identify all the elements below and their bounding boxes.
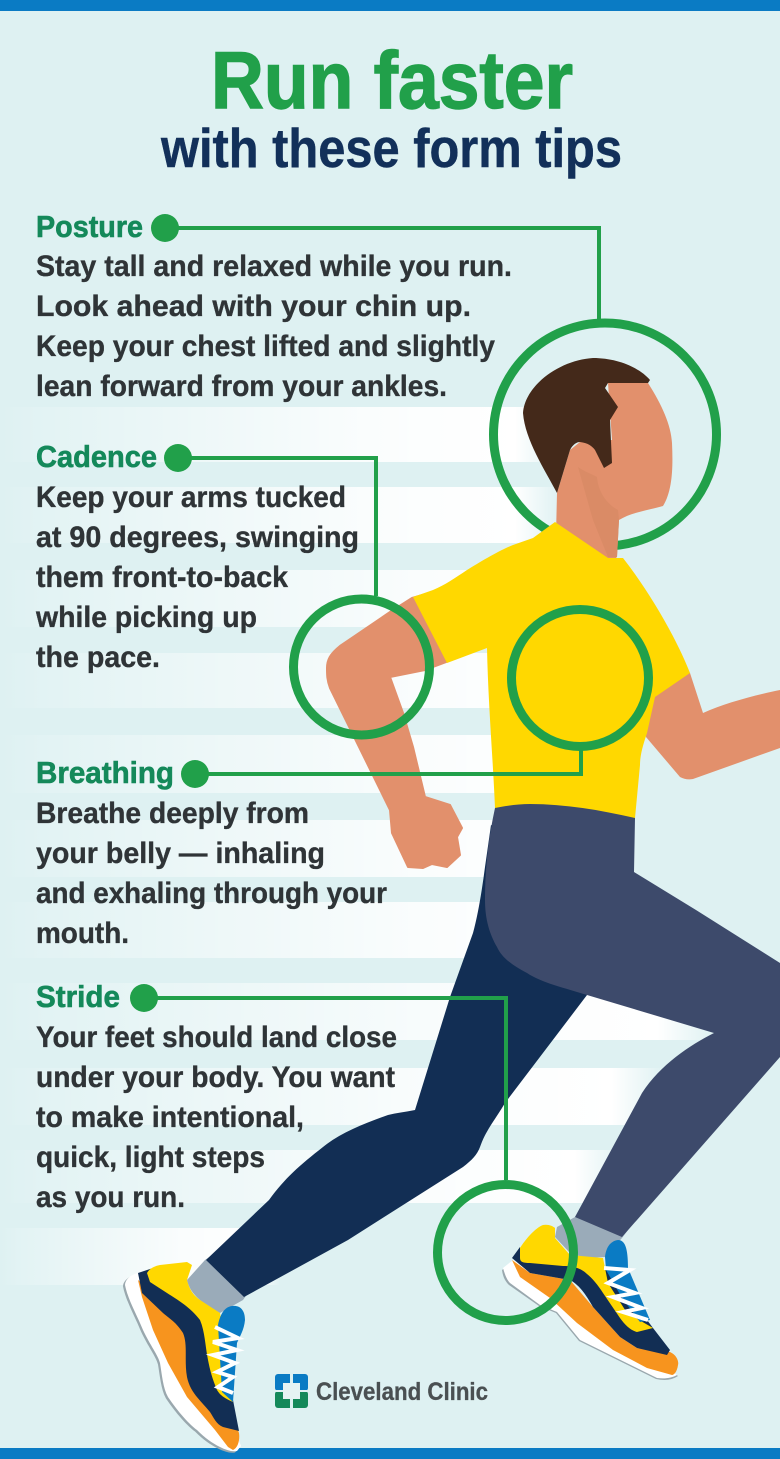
text: stride bbox=[36, 1021, 397, 1214]
text: cadence: Keep your arms tucked bbox=[36, 481, 346, 514]
connector: posture bbox=[165, 228, 599, 320]
panel: breathing bbox=[36, 755, 387, 950]
text: cadence bbox=[35, 481, 359, 674]
dot: breathing bbox=[181, 760, 209, 788]
text: breathing: and exhaling through your bbox=[36, 877, 387, 910]
front leg bbox=[485, 785, 780, 1237]
left arm bbox=[327, 590, 465, 868]
text: posture: lean forward from your ankles. bbox=[36, 370, 447, 403]
heading: stride: Stride bbox=[36, 979, 120, 1014]
connector: cadence bbox=[178, 458, 376, 596]
connector: breathing bbox=[195, 745, 581, 774]
text: breathing bbox=[36, 797, 387, 950]
title: with these form tips bbox=[160, 117, 622, 179]
heading: posture: Posture bbox=[36, 209, 143, 244]
text: cadence: while picking up bbox=[35, 601, 257, 634]
neck shadow bbox=[578, 467, 619, 557]
text: posture: Look ahead with your chin up. bbox=[36, 290, 471, 323]
text: breathing: mouth. bbox=[36, 917, 129, 950]
panel: cadence bbox=[35, 439, 359, 674]
text: cadence: them front-to-back bbox=[36, 561, 288, 594]
runner figure bbox=[123, 358, 780, 1453]
text: breathing: Breathe deeply from bbox=[36, 797, 309, 830]
connector: stride bbox=[144, 998, 506, 1180]
text: cadence: the pace. bbox=[36, 641, 160, 674]
breathing ring bbox=[512, 610, 648, 746]
dot: posture bbox=[151, 214, 179, 242]
title bbox=[160, 36, 622, 179]
dot: stride bbox=[130, 984, 158, 1012]
text: posture: Stay tall and relaxed while you run. bbox=[36, 250, 512, 283]
text: stride: quick, light steps bbox=[36, 1141, 265, 1174]
hair bbox=[523, 358, 650, 493]
text: posture bbox=[36, 250, 512, 403]
text: breathing: your belly — inhaling bbox=[36, 837, 325, 870]
logo: Cleveland Clinic bbox=[275, 1374, 488, 1408]
stride ring bbox=[438, 1184, 574, 1320]
front shoe bbox=[502, 1225, 678, 1380]
rear laces bbox=[213, 1327, 238, 1393]
text: stride: to make intentional, bbox=[36, 1101, 304, 1134]
text: posture: Keep your chest lifted and slightly bbox=[36, 330, 495, 363]
right arm bbox=[640, 665, 780, 779]
cadence ring bbox=[294, 599, 430, 735]
rear shoe bbox=[123, 1262, 245, 1453]
title: Run faster bbox=[211, 36, 573, 126]
rear sock bbox=[187, 1255, 248, 1313]
rear leg bbox=[206, 825, 600, 1297]
bottom bar bbox=[0, 1448, 780, 1459]
text: stride: as you run. bbox=[36, 1181, 185, 1214]
top bar bbox=[0, 0, 780, 11]
heading: breathing: Breathing bbox=[36, 755, 174, 790]
icon: logo mark bbox=[275, 1374, 308, 1408]
shirt bbox=[413, 522, 690, 818]
panel: posture bbox=[36, 209, 512, 403]
heading: cadence: Cadence bbox=[36, 439, 157, 474]
text: cadence: at 90 degrees, swinging bbox=[36, 521, 359, 554]
posture ring bbox=[494, 323, 716, 546]
front sock bbox=[555, 1208, 628, 1258]
neck and face bbox=[556, 383, 672, 565]
text: stride: Your feet should land close bbox=[36, 1021, 397, 1054]
panel: stride bbox=[36, 979, 397, 1214]
text: stride: under your body. You want bbox=[36, 1061, 395, 1094]
dot: cadence bbox=[164, 444, 192, 472]
front laces bbox=[604, 1268, 648, 1320]
logo wordmark: Cleveland Clinic bbox=[316, 1378, 488, 1406]
